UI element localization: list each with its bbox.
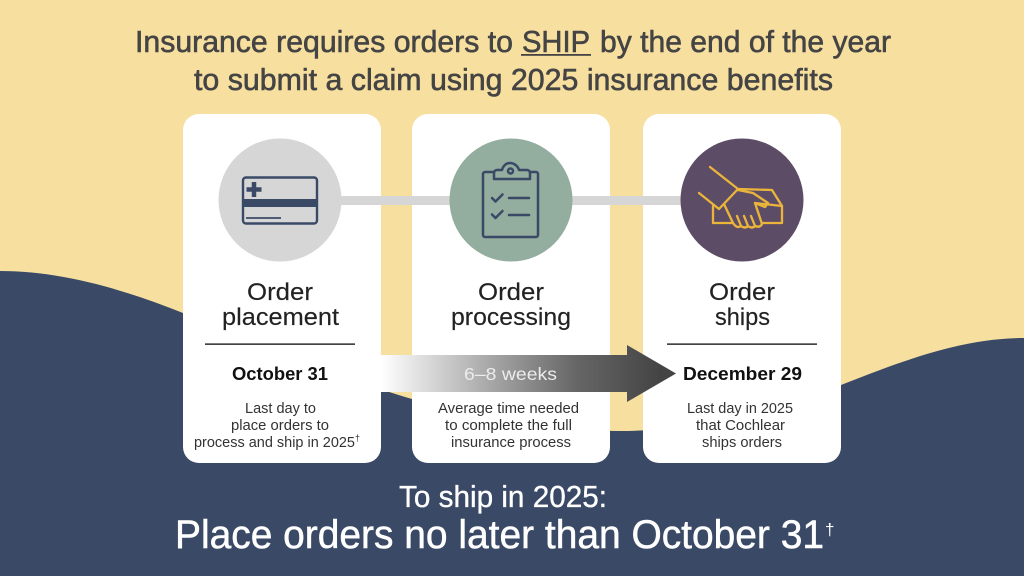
icon: clipboard checklist [450,138,572,262]
text: last day to place orders: process and ship in 2025 [194,435,355,451]
text: last day Cochlear ships: ships orders [702,435,782,451]
text: average time needed: insurance process [451,435,571,451]
arrow: 6-8 weeks [381,345,676,402]
date: December 29: December 29 [683,364,802,384]
title: SHIP [522,24,590,59]
panel: order processing [438,138,579,451]
footer callout [175,479,834,557]
text: last day Cochlear ships: that Cochlear [696,418,785,434]
text: average time needed [438,401,579,451]
heading: order ships: Order [709,279,775,306]
text: average time needed: Average time needed [438,401,579,417]
footer callout: To ship in 2025: [399,479,607,514]
background wave [0,271,1024,576]
text: last day Cochlear ships [687,401,793,451]
footer callout: † [825,520,834,539]
title: Insurance requires orders to [135,24,513,59]
panel: order placement [194,138,360,451]
text: average time needed: to complete the full [445,418,572,434]
connector line [183,114,841,463]
text: last day to place orders: Last day to [245,401,316,417]
heading: order processing: Order [478,279,544,306]
title [135,24,891,97]
heading: order placement: placement [222,304,339,331]
text: last day to place orders [194,401,360,451]
text: last day to place orders: † [355,433,360,443]
title: to submit a claim using 2025 insurance benefits [194,62,833,97]
panel: order ships [667,138,817,451]
title: by the end of the year [600,24,891,59]
heading: order placement [222,279,339,331]
heading: order placement: Order [247,279,313,306]
icon: hand on package [680,138,804,262]
text: last day Cochlear ships: Last day in 2025 [687,401,793,417]
arrow: 6-8 weeks: 6–8 weeks [464,364,557,384]
heading: order processing: processing [451,304,571,331]
heading: order ships [709,279,775,331]
heading: order processing [451,279,571,331]
date: October 31: October 31 [232,364,328,384]
footer callout: Place orders no later than October 31 [175,513,824,557]
text: last day to place orders: place orders to [231,418,329,434]
heading: order ships: ships [715,304,770,331]
icon: insurance card [218,138,342,262]
